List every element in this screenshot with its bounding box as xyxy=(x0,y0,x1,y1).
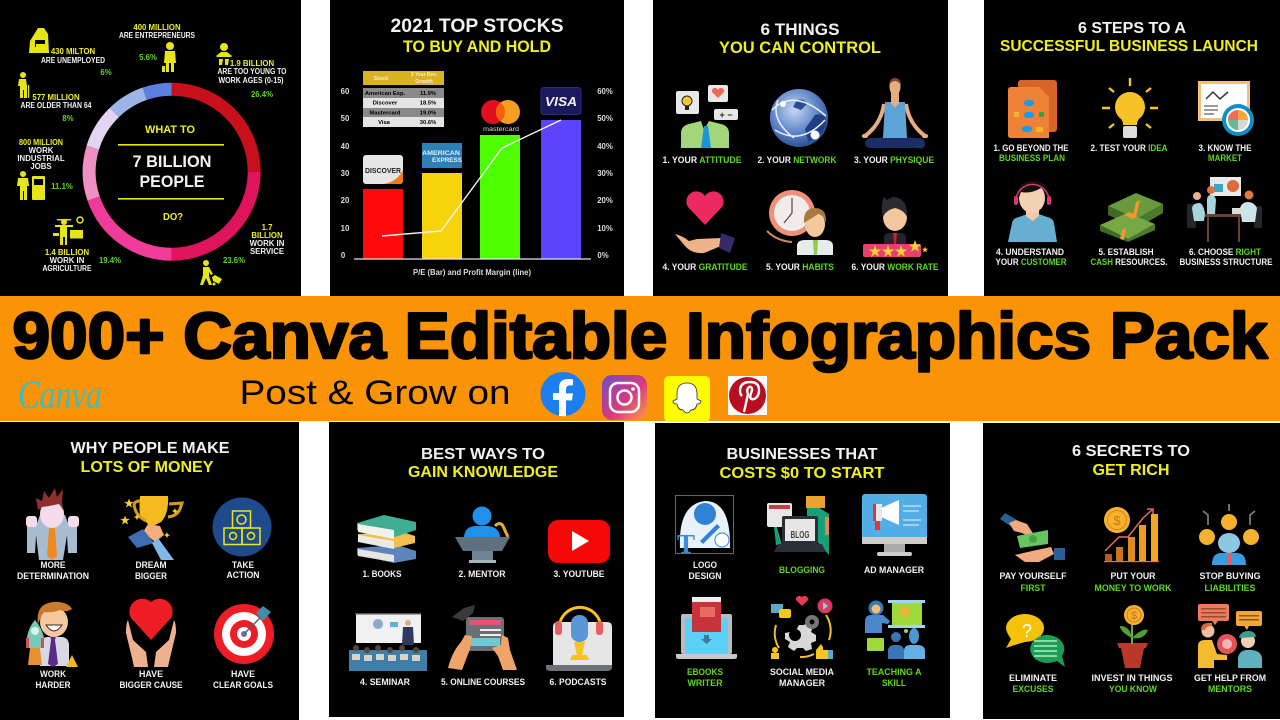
icon: trophy: ★ xyxy=(124,498,134,510)
table: revenue growth: Mastercard xyxy=(370,110,401,116)
labels: row one: 2. MENTOR xyxy=(458,569,506,579)
icon: determined man xyxy=(26,488,79,560)
labels: row two: CASH RESOURCES. xyxy=(1090,257,1168,267)
table: revenue growth: Growth xyxy=(415,79,433,85)
label: older than 64: 577 MILLION xyxy=(32,93,80,102)
label: row two: 5. YOUR HABITS xyxy=(766,262,834,272)
panel: businesses that cost $0 to start xyxy=(655,423,950,718)
labels: row two: YOUR CUSTOMER xyxy=(996,257,1067,267)
heading xyxy=(1000,20,1258,55)
labels: row two: MENTORS xyxy=(1208,684,1252,694)
heading: WHY PEOPLE MAKE xyxy=(70,440,230,457)
icon: books xyxy=(357,515,416,563)
labels: row one: BLOGGING xyxy=(779,565,825,575)
right axis labels: 0% xyxy=(597,251,609,260)
labels: row one: AD MANAGER xyxy=(864,565,925,575)
left axis labels: 10 xyxy=(341,224,350,233)
logo: American Express xyxy=(422,143,463,168)
table: revenue growth xyxy=(363,71,444,127)
label: too young xyxy=(218,59,286,99)
icon: farmer xyxy=(53,217,83,245)
icon: elderly person xyxy=(18,72,29,98)
table: revenue growth: 11.9% xyxy=(420,91,436,97)
panel: 6 things you can control xyxy=(653,0,948,296)
icon: business plan xyxy=(1008,80,1057,138)
right axis labels: 40% xyxy=(597,142,613,151)
icon: logo design xyxy=(676,496,734,559)
labels: row two xyxy=(1009,673,1266,694)
donut centre text: DO? xyxy=(163,212,183,223)
labels: row one: TAKE xyxy=(232,560,254,570)
icon: Snapchat xyxy=(664,376,710,422)
subtitle: Post & Grow on xyxy=(240,374,510,412)
icon: heart in hand xyxy=(675,191,735,253)
icon: meeting xyxy=(1187,177,1262,242)
heading xyxy=(390,15,564,56)
icon: paying hand xyxy=(1000,513,1065,562)
icon: ad manager xyxy=(862,494,927,556)
banner xyxy=(0,296,1280,422)
label: row two xyxy=(662,262,939,272)
labels: row one: MORE xyxy=(40,560,66,570)
icon: target xyxy=(214,604,274,664)
label: service: WORK IN xyxy=(250,239,285,248)
left axis labels: 30 xyxy=(341,169,350,178)
icon: rated employee: ★ xyxy=(909,238,922,254)
label: entrepreneurs: ARE ENTREPRENEURS xyxy=(119,31,195,40)
logo: Discover: DISCOVER xyxy=(365,166,401,175)
labels: row one xyxy=(688,560,925,581)
labels: row one xyxy=(1000,571,1261,593)
heading: YOU CAN CONTROL xyxy=(719,39,881,57)
label: too young: WORK AGES (0-15) xyxy=(218,76,284,85)
icon: blogging xyxy=(767,496,829,555)
right axis labels: 60% xyxy=(597,87,613,96)
panel: 6 steps to a successful business launch xyxy=(984,0,1280,296)
labels: row two: 6. CHOOSE RIGHT xyxy=(1189,247,1262,257)
panel: 2021 top stocks xyxy=(330,0,624,296)
icon: customer agent xyxy=(1008,181,1057,242)
icon: Pinterest xyxy=(728,376,767,415)
label: industrial jobs: 800 MILLION xyxy=(19,138,63,147)
labels: row two: WRITER xyxy=(688,678,723,688)
labels: row two: EXCUSES xyxy=(1012,684,1054,694)
logo: American Express: AMERICAN xyxy=(422,150,460,157)
label: agriculture: AGRICULTURE xyxy=(42,264,92,273)
icon: globe network xyxy=(770,89,828,147)
panel: best ways to gain knowledge xyxy=(329,422,624,717)
label: entrepreneurs: 5.6% xyxy=(139,53,157,62)
label: unemployed xyxy=(41,47,112,77)
icon: cash stacks xyxy=(1100,193,1163,242)
icon: unemployed person xyxy=(29,28,49,53)
icon: rated employee: ★ xyxy=(882,243,895,259)
icon: money growth: $ xyxy=(1113,513,1121,528)
heading xyxy=(720,446,885,482)
heading: BEST WAYS TO xyxy=(421,446,545,463)
table: revenue growth: Discover xyxy=(373,100,398,106)
heading: 2021 TOP STOCKS xyxy=(390,15,564,37)
donut chart xyxy=(89,89,254,254)
logo: Mastercard: mastercard xyxy=(483,126,519,133)
label: unemployed: ARE UNEMPLOYED xyxy=(41,56,105,65)
label: agriculture: 1.4 BILLION xyxy=(45,248,89,257)
labels: row one: MARKET xyxy=(1208,153,1243,163)
labels: row one: BUSINESS PLAN xyxy=(999,153,1065,163)
chart caption: P/E (Bar) and Profit Margin (line) xyxy=(413,268,531,277)
icon: rated employee: ★ xyxy=(895,243,908,259)
line chart xyxy=(382,120,561,236)
labels: row one: FIRST xyxy=(1020,583,1046,593)
panel: what 7 billion people do xyxy=(0,0,301,296)
icon: YouTube xyxy=(548,520,610,563)
labels: row two: SKILL xyxy=(882,678,907,688)
left axis labels: 40 xyxy=(341,142,350,151)
labels: row one: MONEY TO WORK xyxy=(1094,583,1172,593)
icon: entrepreneur xyxy=(162,42,176,72)
heading xyxy=(719,20,881,57)
labels: row two xyxy=(687,667,922,688)
label: service: SERVICE xyxy=(250,247,284,256)
label: agriculture xyxy=(42,248,121,273)
left axis labels: 60 xyxy=(341,87,350,96)
icon: baby xyxy=(216,43,232,65)
labels: row two: BIGGER CAUSE xyxy=(120,680,183,690)
heading: SUCCESSFUL BUSINESS LAUNCH xyxy=(1000,38,1258,55)
labels: row one: DESIGN xyxy=(688,571,722,581)
label: older than 64: ARE OLDER THAN 64 xyxy=(20,101,92,110)
heading: TO BUY AND HOLD xyxy=(403,38,551,56)
labels: row one: ACTION xyxy=(226,570,260,580)
icon: social media xyxy=(771,596,833,659)
labels: row one: BIGGER xyxy=(135,571,168,581)
labels: row one: LIABILITIES xyxy=(1204,583,1256,593)
icon: rated employee: ★ xyxy=(869,243,882,259)
label: older than 64: 8% xyxy=(62,114,74,123)
right axis labels: 50% xyxy=(597,114,613,123)
table: revenue growth: 18.5% xyxy=(420,100,436,106)
labels: row two: HARDER xyxy=(36,680,71,690)
logo: Visa: VISA xyxy=(545,94,577,109)
heading: 6 THINGS xyxy=(760,20,840,39)
left axis labels: 20 xyxy=(341,196,350,205)
labels: row one: 3. YOUTUBE xyxy=(554,569,605,579)
icon: rated employee: ★ xyxy=(922,246,929,254)
icon: podcast laptop xyxy=(546,607,612,671)
icon: teaching xyxy=(865,600,925,659)
icon: ebook laptop xyxy=(676,597,737,659)
labels: row one: LOGO xyxy=(693,560,717,570)
labels: row one: STOP BUYING xyxy=(1200,571,1261,581)
donut centre text: 7 BILLION xyxy=(132,153,212,171)
icon: trophy xyxy=(120,496,182,560)
heading xyxy=(70,440,230,476)
label: entrepreneurs xyxy=(119,23,195,62)
icon: mentors xyxy=(1198,604,1262,668)
labels: row two: MANAGER xyxy=(779,678,826,688)
panel: 6 secrets to get rich xyxy=(983,423,1280,719)
labels: row one: 1. GO BEYOND THE xyxy=(994,143,1069,153)
labels: row two: 5. ONLINE COURSES xyxy=(441,677,525,687)
heading xyxy=(1072,443,1190,479)
table: revenue growth: Visa xyxy=(378,120,391,126)
labels: row two: GET HELP FROM xyxy=(1194,673,1266,683)
icon: attitude xyxy=(676,85,738,148)
logo: Discover xyxy=(363,155,403,184)
label: row one: 3. YOUR PHYSIQUE xyxy=(854,155,934,165)
label: industrial jobs: INDUSTRIAL xyxy=(17,154,65,163)
table: revenue growth: Stock xyxy=(374,76,389,82)
left axis labels xyxy=(341,87,350,260)
labels: row one: 1. BOOKS xyxy=(362,569,402,579)
right axis labels xyxy=(597,87,613,260)
icon: money growth xyxy=(1104,507,1159,562)
icon: trophy: ✦ xyxy=(164,531,171,540)
icon: clock and person xyxy=(767,190,833,255)
labels: row two: 4. UNDERSTAND xyxy=(996,247,1064,257)
label: service: BILLION xyxy=(251,231,283,240)
table: revenue growth: American Exp. xyxy=(365,91,406,97)
icon: excuses speech bubbles: ? xyxy=(1022,621,1032,641)
right axis labels: 10% xyxy=(597,224,613,233)
label: industrial jobs xyxy=(17,138,73,191)
labels: row one: PUT YOUR xyxy=(1110,571,1156,581)
labels: row two: WORK xyxy=(40,669,67,679)
labels: row one: DETERMINATION xyxy=(17,571,89,581)
labels: row one xyxy=(994,143,1252,163)
labels: row two: HAVE xyxy=(139,669,163,679)
heading: COSTS $0 TO START xyxy=(720,465,885,482)
table: revenue growth: 3 Year Rev. xyxy=(411,72,438,78)
logo: Visa xyxy=(541,88,581,114)
labels: row two: 5. ESTABLISH xyxy=(1098,247,1154,257)
labels: row two: YOU KNOW xyxy=(1109,684,1158,694)
icon: rocket man xyxy=(26,602,78,667)
icon: rated employee xyxy=(863,197,929,259)
right axis labels: 30% xyxy=(597,169,613,178)
donut centre text: WHAT TO xyxy=(145,124,195,136)
label: unemployed: 430 MILTON xyxy=(51,47,96,56)
labels: row two: TEACHING A xyxy=(866,667,922,677)
label: agriculture: 19.4% xyxy=(99,256,121,265)
icon: logo design: T xyxy=(677,529,695,559)
heading: GAIN KNOWLEDGE xyxy=(408,464,558,481)
labels: row one: 2. TEST YOUR IDEA xyxy=(1090,143,1168,153)
label: row two: 4. YOUR GRATITUDE xyxy=(662,262,748,272)
donut centre text xyxy=(118,124,224,223)
heading: 6 SECRETS TO xyxy=(1072,443,1190,460)
labels: row two: CLEAR GOALS xyxy=(213,680,273,690)
icon: stop liabilities xyxy=(1199,504,1259,565)
icon: yoga physique xyxy=(862,78,928,148)
right axis labels: 20% xyxy=(597,196,613,205)
heading: LOTS OF MONEY xyxy=(80,459,214,476)
icon: Instagram xyxy=(602,375,647,420)
labels: row one: PAY YOURSELF xyxy=(1000,571,1067,581)
icon: seminar xyxy=(349,613,427,671)
labels: row two: ELIMINATE xyxy=(1009,673,1057,683)
label: older than 64 xyxy=(20,93,92,123)
labels: row two: EBOOKS xyxy=(687,667,723,677)
icon: mentor at podium xyxy=(455,506,510,563)
donut centre text: PEOPLE xyxy=(140,173,204,191)
icon: coin plant: $ xyxy=(1131,610,1137,622)
labels: row two: HAVE xyxy=(231,669,255,679)
heading: GET RICH xyxy=(1092,462,1170,479)
labels: row two xyxy=(36,669,273,690)
table: revenue growth: 19.0% xyxy=(420,110,436,116)
label: too young: ARE TOO YOUNG TO xyxy=(218,67,286,76)
table: revenue growth: 30.6% xyxy=(420,120,436,126)
icon: attitude: + − xyxy=(719,110,733,120)
label: row one xyxy=(662,155,934,165)
label: too young: 1.9 BILLION xyxy=(230,59,274,68)
heading: 6 STEPS TO A xyxy=(1078,20,1186,37)
labels: row two: SOCIAL MEDIA xyxy=(770,667,835,677)
labels: row two xyxy=(996,247,1273,267)
icon: action blocks xyxy=(212,498,272,556)
icon: heart in hands xyxy=(126,599,176,667)
labels: row two xyxy=(360,677,607,687)
label: service: 23.6% xyxy=(223,256,245,265)
icon: Facebook xyxy=(540,372,586,416)
label: service xyxy=(223,223,285,265)
icon: light bulb xyxy=(1102,78,1158,138)
labels: row one xyxy=(17,560,260,581)
icon: industrial worker and machine xyxy=(17,171,45,200)
icon: excuses speech bubbles xyxy=(1006,614,1065,667)
icon: trophy: ✦ xyxy=(134,513,141,522)
label: industrial jobs: WORK xyxy=(29,146,54,155)
label: unemployed: 6% xyxy=(100,68,112,77)
labels: row two: 4. SEMINAR xyxy=(360,677,411,687)
panel: why people make lots of money xyxy=(0,422,299,720)
bar chart xyxy=(354,120,591,260)
labels: row two: INVEST IN THINGS xyxy=(1092,673,1173,683)
banner title: 900+ Canva Editable Infographics Pack xyxy=(12,299,1268,372)
Canva logo: Canva xyxy=(18,372,102,417)
heading: BUSINESSES THAT xyxy=(726,446,878,463)
label: row two: 6. YOUR WORK RATE xyxy=(852,262,939,272)
logo: American Express: EXPRESS xyxy=(432,157,463,164)
labels: row one xyxy=(362,569,605,579)
icon: market chart xyxy=(1198,81,1254,136)
label: industrial jobs: 11.1% xyxy=(51,182,73,191)
left axis labels: 50 xyxy=(341,114,350,123)
labels: row two: 6. PODCASTS xyxy=(550,677,607,687)
heading xyxy=(408,446,558,481)
label: too young: 26.4% xyxy=(251,90,273,99)
icon: trophy: ✦ xyxy=(172,507,179,516)
logo: Mastercard xyxy=(481,100,520,133)
labels: row one: DREAM xyxy=(136,560,166,570)
labels: row one: 3. KNOW THE xyxy=(1198,143,1252,153)
label: entrepreneurs: 400 MILLION xyxy=(133,23,181,32)
icon: coin plant xyxy=(1117,605,1148,668)
icon: online courses xyxy=(448,605,517,670)
label: industrial jobs: JOBS xyxy=(30,162,52,171)
label: row one: 2. YOUR NETWORK xyxy=(758,155,837,165)
labels: row two: BUSINESS STRUCTURE xyxy=(1180,257,1273,267)
label: service: 1.7 xyxy=(262,223,272,232)
label: row one: 1. YOUR ATTITUDE xyxy=(662,155,742,165)
icon: delivery worker xyxy=(200,260,222,286)
icon: trophy: ★ xyxy=(120,515,130,527)
icon: blogging: BLOG xyxy=(790,530,810,541)
label: agriculture: WORK IN xyxy=(50,256,85,265)
left axis labels: 0 xyxy=(341,251,346,260)
